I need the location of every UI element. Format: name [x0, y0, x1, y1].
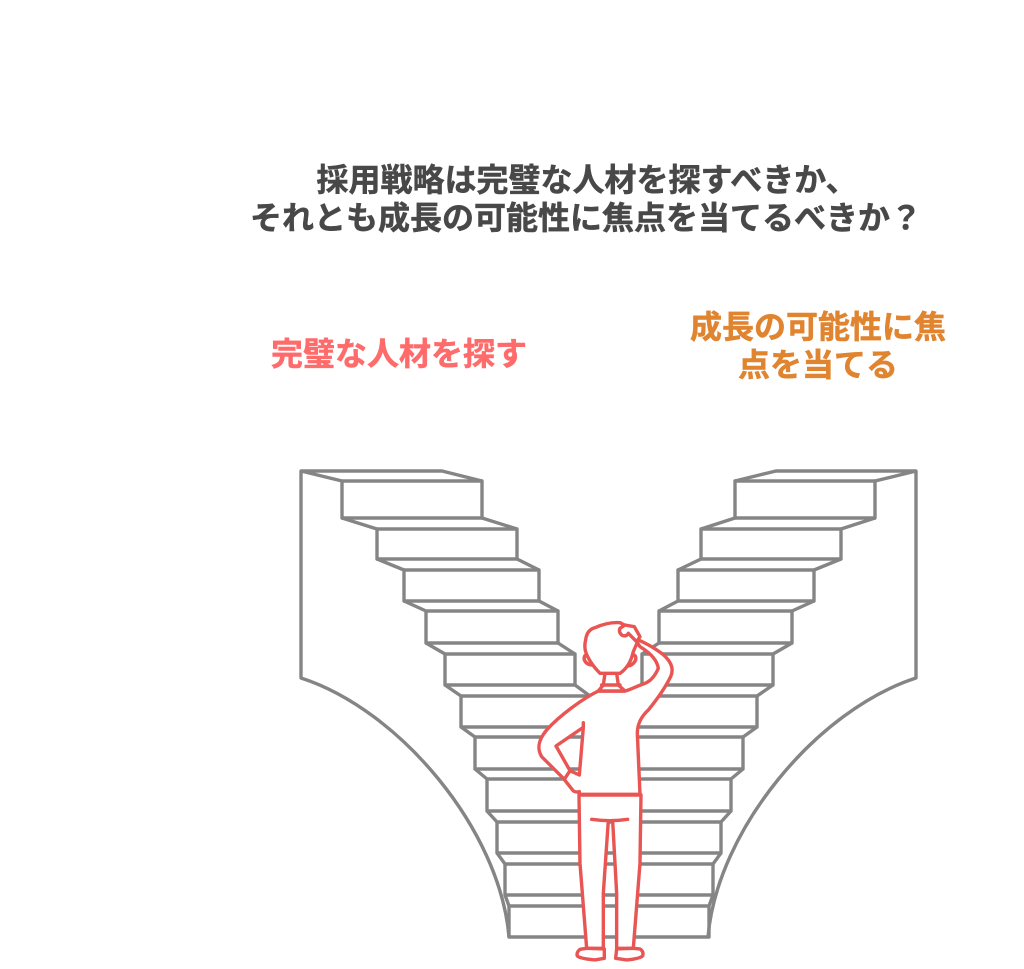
hand — [619, 625, 640, 642]
left staircase wall — [301, 471, 509, 937]
legs — [577, 795, 643, 960]
option label: growth potential — [690, 309, 946, 383]
steps — [342, 481, 875, 937]
title: それとも成長の可能性に焦点を当てるべきか？ — [250, 200, 922, 236]
torso and arms — [539, 640, 672, 794]
title — [250, 162, 922, 236]
neck and collar — [598, 673, 625, 691]
option label: perfect talent: 完璧な人材を探す — [271, 336, 527, 372]
option label: growth potential: 成長の可能性に焦 — [690, 309, 946, 345]
title: 採用戦略は完璧な人材を探すべきか、 — [316, 162, 858, 198]
head — [585, 623, 638, 673]
option label: growth potential: 点を当てる — [738, 347, 898, 383]
right staircase wall — [708, 471, 916, 937]
person scratching head — [539, 623, 672, 960]
ears — [584, 654, 593, 665]
upper body — [539, 623, 672, 794]
staircases — [301, 471, 916, 937]
